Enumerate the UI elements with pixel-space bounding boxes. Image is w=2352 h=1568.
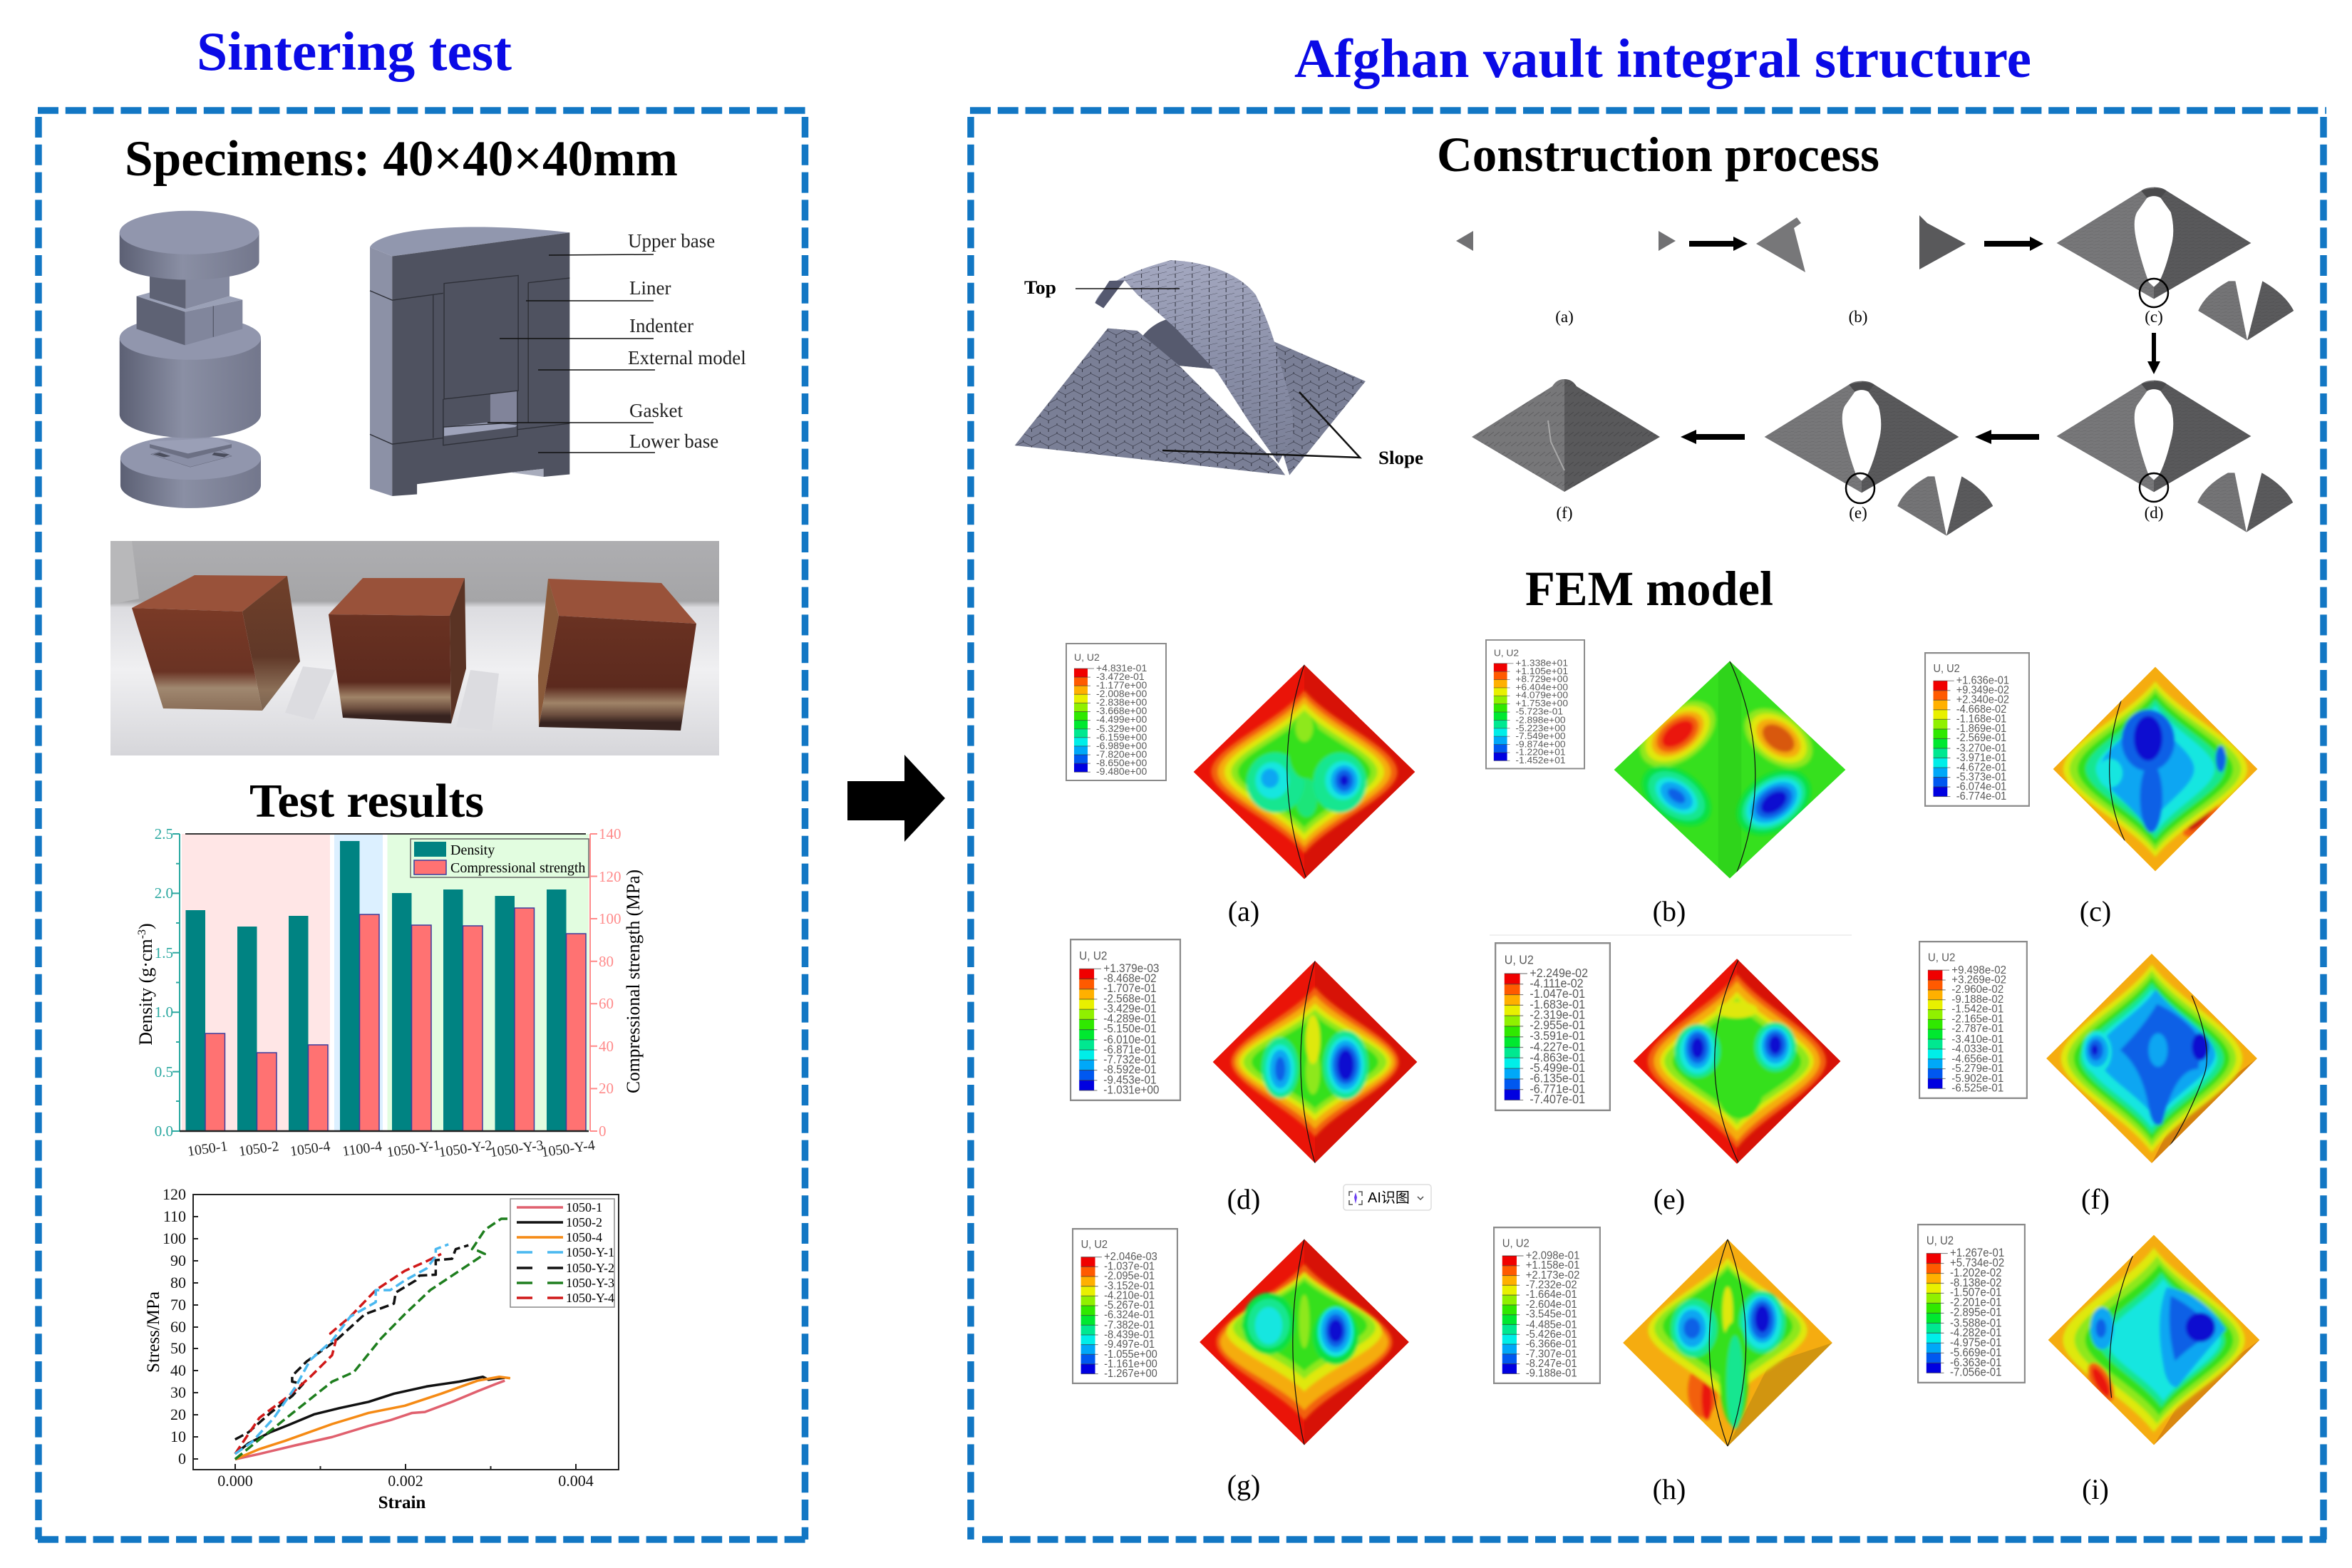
construction step (c) [2057,187,2294,341]
legend (a): -3.472e-01 [1096,671,1145,682]
legend (d): -5.150e-01 [1103,1023,1157,1036]
legend (e): -4.111e-02 [1530,976,1584,991]
bar chart: density and compressional strength: 1050-2 [238,1138,280,1160]
line chart: stress-strain curves: 0.002 [388,1472,423,1490]
legend (b): +8.729e+00 [1515,674,1568,684]
legend (g): -1.055e+00 [1104,1348,1157,1361]
legend (f): -5.279e-01 [1951,1063,2003,1075]
construction step (b) [1756,215,1966,326]
legend (i): -3.588e-01 [1950,1317,2001,1330]
callouts: mould part labels: External model [628,347,746,368]
construction step (e): (e) [1849,504,1867,522]
legend (e): U, U2 [1505,953,1534,967]
legend (f): -3.410e-01 [1951,1033,2003,1046]
construction step (b): (b) [1849,308,1867,326]
legend (f) [1919,942,2027,1098]
legend (f): -4.033e-01 [1951,1043,2003,1056]
bars [185,841,586,1131]
legend (d): -4.289e-01 [1103,1013,1157,1026]
figure: vault top and slope components [1015,260,1366,475]
legend (e): -2.319e-01 [1530,1008,1585,1022]
legend (b): +1.753e+00 [1515,698,1568,708]
line chart: stress-strain curves: 90 [170,1252,186,1269]
legend (h): -3.545e-01 [1526,1308,1577,1321]
bar chart: density and compressional strength: 1.5 [155,944,173,961]
legend (a): U, U2 [1074,651,1100,663]
legend (d): +1.379e-03 [1103,963,1160,975]
legend (c): -5.373e-01 [1956,771,2006,783]
sub-figure labels (a) to (i): (e) [1654,1183,1685,1215]
callouts: mould part labels: Indenter [629,315,693,336]
FEM result (f) contour [2046,954,2257,1163]
construction step (a): (a) [1555,308,1574,326]
legend (i): -5.669e-01 [1950,1346,2001,1359]
line chart: stress-strain curves [144,1185,619,1512]
legend (a): -7.820e+00 [1096,748,1147,760]
line chart: stress-strain curves: 0.004 [558,1472,594,1490]
legend (f): -9.188e-02 [1951,994,2003,1006]
legend (h): -8.247e-01 [1526,1358,1577,1370]
FEM result (b) contour [1614,661,1846,878]
bar chart: density and compressional strength: 1050-4 [289,1138,331,1160]
sub-figure labels (a) to (i): (b) [1653,895,1686,927]
legend (g): -1.161e+00 [1104,1358,1157,1370]
legend (b): -1.452e+01 [1515,755,1566,765]
construction step (c): (c) [2145,308,2163,326]
heading: Specimens: Specimens: 40×40×40mm [125,131,678,187]
legend (a): -1.177e+00 [1096,679,1147,691]
callouts: Top and Slope: Top [1024,277,1056,298]
legend (b): +1.105e+01 [1515,666,1568,676]
line chart: stress-strain curves: 30 [170,1383,186,1401]
bar chart: density and compressional strength: 60 [599,995,614,1012]
button: AI image recognition chip: AI识图 [1368,1190,1410,1206]
legend (b): -7.549e+00 [1515,731,1566,741]
legend (f): -1.542e-01 [1951,1003,2003,1016]
FEM result (i) contour [2048,1234,2259,1445]
panel: Afghan vault dashed frame [970,110,2326,1539]
construction step (d): (d) [2145,504,2163,522]
legend (i): -2.895e-01 [1950,1306,2001,1319]
bar chart: density and compressional strength: 0 [599,1123,606,1140]
legend (e) [1495,943,1610,1110]
legend (g): -2.095e-01 [1104,1270,1155,1282]
legend (g): +2.046e-03 [1104,1251,1157,1263]
legend (i): -2.201e-01 [1950,1296,2001,1309]
construction step (a) [1456,231,1676,326]
panel: sintering test dashed frame [38,110,807,1539]
legend (g) [1073,1229,1177,1383]
FEM result (g) contour [1200,1239,1409,1445]
legend (d): -9.453e-01 [1103,1074,1157,1086]
legend (b): +1.338e+01 [1515,658,1568,669]
legend (a): -9.480e+00 [1096,765,1147,777]
legend (f): +9.498e-02 [1951,964,2006,976]
legend (f): -2.165e-01 [1951,1013,2003,1026]
legend (f): U, U2 [1928,951,1955,964]
legend (c): -4.668e-02 [1956,703,2006,716]
legend (d): U, U2 [1079,950,1108,963]
line chart legend: 1050-1 [566,1200,602,1214]
legend (e): -4.227e-01 [1530,1040,1585,1054]
legend (e): -6.771e-01 [1530,1082,1585,1096]
legend (c): +1.636e-01 [1956,674,2009,687]
legend (i): -7.056e-01 [1950,1366,2001,1379]
legend (c): U, U2 [1934,663,1960,675]
legend (e): -4.863e-01 [1530,1051,1585,1065]
legend (a): -2.838e+00 [1096,696,1147,708]
legend (d): -8.592e-01 [1103,1064,1157,1076]
legend (b): -2.898e+00 [1515,715,1566,725]
legend (h) [1494,1227,1600,1383]
legend (i): U, U2 [1927,1234,1954,1247]
legend (h): -1.664e-01 [1526,1289,1577,1301]
chart legend: Compressional strength [450,860,585,876]
legend (h): -4.485e-01 [1526,1319,1577,1331]
legend (f): +3.269e-02 [1951,974,2006,986]
legend (i): -1.202e-02 [1950,1267,2001,1279]
legend (d): -8.468e-02 [1103,973,1157,985]
bar chart: density and compressional strength: 2.5 [155,825,173,842]
legend (h): +1.158e-01 [1526,1259,1579,1272]
legend (b): +6.404e+00 [1515,682,1568,692]
sub-figure labels (a) to (i): (f) [2081,1183,2110,1215]
line chart legend: 1050-Y-3 [566,1276,614,1290]
legend (g): -1.267e+00 [1104,1367,1157,1380]
legend (e): -1.683e-01 [1530,997,1585,1011]
callouts: mould part labels: Liner [629,277,671,299]
legend (f): -6.525e-01 [1951,1082,2003,1095]
legend (a) [1066,644,1166,780]
legend (g): U, U2 [1081,1239,1108,1251]
legend (b): U, U2 [1494,648,1519,658]
legend (g): -4.210e-01 [1104,1289,1155,1301]
legend (d): -6.871e-01 [1103,1044,1157,1056]
bar chart: density and compressional strength: 1050-Y-3 [489,1138,545,1160]
legend (h): -7.232e-02 [1526,1279,1577,1291]
legend (i) [1918,1224,2025,1383]
construction step (d) [2057,381,2293,532]
legend (d) [1071,939,1180,1100]
bar chart: density and compressional strength: -3 [136,929,148,939]
sub-figure labels (a) to (i): (i) [2082,1473,2109,1505]
heading: Test results: Test results [249,775,484,827]
line chart: stress-strain curves: Strain [378,1493,425,1512]
line chart: stress-strain curves: 70 [170,1296,186,1314]
legend (i): -8.138e-02 [1950,1276,2001,1289]
legend (h): +2.173e-02 [1526,1269,1579,1281]
legend (d): -7.732e-01 [1103,1054,1157,1066]
FEM result (a) contour [1193,664,1415,880]
legend (c): -1.168e-01 [1956,713,2006,726]
legend (f): -4.656e-01 [1951,1053,2003,1066]
legend (d): -1.031e+00 [1103,1084,1160,1097]
legend (a): -6.159e+00 [1096,731,1147,743]
bar chart: density and compressional strength: Density (g·cm [135,939,156,1046]
legend (e): -3.591e-01 [1530,1028,1585,1043]
bar chart: density and compressional strength: Compressional strength (MPa) [623,870,644,1093]
legend (h): -5.426e-01 [1526,1329,1577,1341]
sub-figure labels (a) to (i) [1227,895,2111,1505]
legend (c): +2.340e-02 [1956,693,2009,706]
arrow: b to c [1984,237,2043,251]
legend (g): -1.037e-01 [1104,1260,1155,1273]
legend (f): -5.902e-01 [1951,1073,2003,1085]
legend (b): +4.079e+00 [1515,690,1568,701]
legend (f): -2.787e-01 [1951,1023,2003,1035]
figure: exploded mould assembly [120,211,261,508]
legend (a): -4.499e+00 [1096,713,1147,725]
legend (g): -6.324e-01 [1104,1309,1155,1321]
bar chart: density and compressional strength: 120 [599,868,621,885]
line chart legend: 1050-4 [566,1230,602,1244]
bar chart: density and compressional strength: 40 [599,1038,614,1055]
legend (a): -3.668e+00 [1096,705,1147,716]
legend (e): -7.407e-01 [1530,1093,1585,1106]
construction step (e) [1765,381,1993,536]
FEM result (e) contour [1634,959,1840,1164]
legend (g): -5.267e-01 [1104,1299,1155,1311]
legend (b) [1486,640,1584,768]
legend (c): +9.349e-02 [1956,684,2009,696]
legend (g): -7.382e-01 [1104,1319,1155,1331]
line chart: stress-strain curves: 0 [178,1450,186,1468]
construction step (f) [1472,379,1660,522]
bar chart: density and compressional strength: 1050-1 [187,1138,229,1160]
sub-figure labels (a) to (i): (d) [1227,1183,1260,1215]
title: Afghan vault integral structure: Afghan vault integral structure [1294,28,2031,89]
legend (i): +1.267e-01 [1950,1247,2004,1259]
legend (g): -9.497e-01 [1104,1339,1155,1351]
bar chart: density and compressional strength: 2.0 [155,884,173,902]
callouts: mould part labels: Lower base [629,430,718,452]
legend (d): -1.707e-01 [1103,983,1157,995]
legend (h): -9.188e-01 [1526,1367,1577,1380]
legend (a): -6.989e+00 [1096,740,1147,751]
legend (e): -6.135e-01 [1530,1071,1585,1085]
heading: Construction process: Construction process [1437,128,1879,182]
legend (a): +4.831e-01 [1096,662,1147,674]
legend (i): -6.363e-01 [1950,1356,2001,1369]
heading: FEM model: FEM model [1525,562,1773,616]
legend (i): -4.975e-01 [1950,1337,2001,1349]
stress-strain curves [235,1219,510,1459]
legend (b): -1.220e+01 [1515,747,1566,758]
legend (d): -3.429e-01 [1103,1003,1157,1016]
bar chart: density and compressional strength: 20 [599,1080,614,1097]
sub-figure labels (a) to (i): (a) [1228,895,1259,927]
photo: three sintered specimens [110,541,719,755]
legend (a): -8.650e+00 [1096,757,1147,768]
legend (h): U, U2 [1502,1237,1530,1250]
sub-figure labels (a) to (i): (h) [1653,1473,1686,1505]
legend (i): +5.734e-02 [1950,1257,2004,1269]
arrow: d to e [1975,430,2039,444]
line chart legend [510,1199,614,1307]
legend (c): -1.869e-01 [1956,722,2006,735]
bar chart: density and compressional strength: ) [135,923,156,929]
legend (d): -6.010e-01 [1103,1033,1157,1046]
bar chart: density and compressional strength: 0.5 [155,1063,173,1080]
line chart: stress-strain curves: 120 [163,1185,186,1203]
legend (c) [1925,653,2029,806]
sub-figure labels (a) to (i): (c) [2080,895,2111,927]
legend (g): -8.439e-01 [1104,1329,1155,1341]
legend (b): -5.223e+00 [1515,723,1566,733]
line chart legend: 1050-Y-4 [566,1291,614,1305]
callouts: Top and Slope [1024,277,1423,468]
legend (h): -7.307e-01 [1526,1348,1577,1361]
bar chart: density and compressional strength: 1100-4 [341,1138,383,1160]
line chart: stress-strain curves: 0.000 [217,1472,253,1490]
legend (i): -4.282e-01 [1950,1327,2001,1339]
button: AI image recognition chip [1343,1185,1431,1210]
legend (a): -2.008e+00 [1096,688,1147,699]
line chart: stress-strain curves: 40 [170,1361,186,1379]
line chart: stress-strain curves: 10 [170,1428,186,1445]
legend (e): +2.249e-02 [1530,966,1588,980]
FEM result (c) contour [2053,667,2258,871]
legend (c): -3.971e-01 [1956,752,2006,764]
legend (e): -1.047e-01 [1530,987,1585,1001]
construction step (f): (f) [1557,504,1572,522]
arrow: e to f [1681,430,1745,444]
bar chart: density and compressional strength: 1050-Y-1 [386,1138,441,1160]
legend (c): -3.270e-01 [1956,742,2006,755]
legend (e): -2.955e-01 [1530,1018,1585,1032]
legend (f): -2.960e-02 [1951,984,2003,996]
line chart: stress-strain curves: Stress/MPa [144,1291,163,1373]
line chart: stress-strain curves: 60 [170,1318,186,1336]
line chart legend: 1050-Y-2 [566,1261,614,1275]
legend (i): -1.507e-01 [1950,1286,2001,1299]
chart legend: Density [450,842,495,858]
line chart legend: 1050-2 [566,1215,602,1229]
bar chart: density and compressional strength [135,825,644,1160]
callouts: Top and Slope: Slope [1378,448,1423,468]
legend (c): -4.672e-01 [1956,761,2006,774]
bar chart: density and compressional strength: 140 [599,825,621,842]
legend (c): -2.569e-01 [1956,732,2006,744]
line chart: stress-strain curves: 110 [163,1207,186,1225]
legend (c): -6.074e-01 [1956,780,2006,793]
legend (h): +2.098e-01 [1526,1249,1579,1262]
arrow: c to d [2147,333,2160,374]
bar chart: density and compressional strength: 1.0 [155,1004,173,1021]
chart legend [411,839,589,877]
callouts: mould part labels: Upper base [628,230,715,252]
FEM result (h) contour [1623,1239,1832,1447]
bar chart: density and compressional strength: 0.0 [155,1123,173,1140]
legend (h): -6.366e-01 [1526,1338,1577,1351]
arrow: a to b [1689,237,1748,251]
legend (e): -5.499e-01 [1530,1061,1585,1075]
legend (c): -6.774e-01 [1956,790,2006,803]
line chart: stress-strain curves: 100 [163,1229,186,1247]
line chart: stress-strain curves: 20 [170,1405,186,1423]
bar chart: density and compressional strength: 1050-Y-2 [438,1138,493,1160]
line chart: stress-strain curves: 80 [170,1274,186,1291]
arrow: from sintering test to vault structure [847,755,945,842]
legend (h): -2.604e-01 [1526,1298,1577,1311]
line chart: stress-strain curves: 50 [170,1339,186,1357]
callouts: mould part labels: Gasket [629,400,683,421]
legend (a): -5.329e+00 [1096,723,1147,734]
bar chart: density and compressional strength: 100 [599,910,621,927]
legend (g): -3.152e-01 [1104,1279,1155,1292]
line chart legend: 1050-Y-1 [566,1245,614,1259]
legend (b): -9.874e+00 [1515,739,1566,749]
bar chart: density and compressional strength: 80 [599,953,614,970]
bar chart: density and compressional strength: 1050-Y-4 [540,1138,596,1160]
legend (b): -5.723e-01 [1515,706,1563,716]
callouts: mould part labels [488,230,746,453]
sub-figure labels (a) to (i): (g) [1227,1469,1260,1501]
title: Sintering test: Sintering test [197,21,512,82]
FEM result (d) contour [1213,961,1417,1163]
legend (d): -2.568e-01 [1103,993,1157,1005]
figure: mould cross-section [370,227,569,496]
